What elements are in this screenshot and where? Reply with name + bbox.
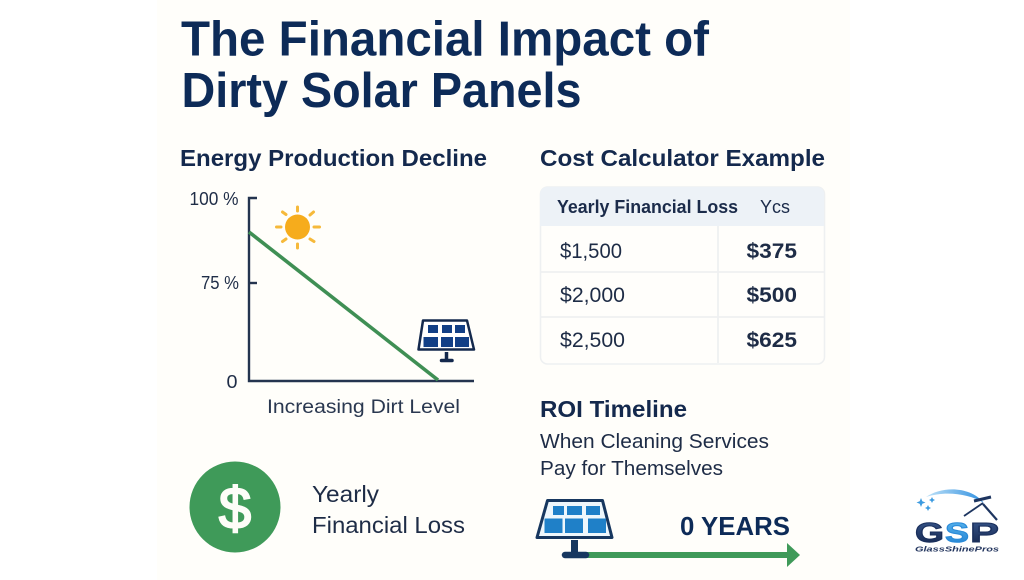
- arrow: [585, 543, 800, 567]
- y axis labels: 75 %: [201, 272, 239, 293]
- table header: [540, 187, 824, 226]
- callout text: [312, 481, 465, 538]
- text: roi subtitle: [540, 431, 769, 480]
- callout: yearly financial loss: [190, 462, 465, 552]
- heading: energy production decline: Energy Production Decline: [180, 145, 487, 171]
- title: [181, 12, 710, 118]
- icon: sun: [276, 207, 320, 248]
- table row: 2500: [560, 329, 797, 352]
- icon: solar panel: [537, 500, 612, 555]
- logo letters: P: [970, 517, 999, 548]
- heading: cost calculator example: Cost Calculator Example: [540, 145, 825, 171]
- y axis labels: 100 %: [190, 188, 238, 209]
- callout text: Yearly: [312, 481, 379, 507]
- x axis label: Increasing Dirt Level: [267, 397, 460, 418]
- icon: solar panel: [418, 320, 474, 360]
- table header: Yearly Financial Loss: [557, 197, 738, 217]
- title: The Financial Impact of: [181, 12, 710, 66]
- text: roi subtitle: Pay for Themselves: [540, 458, 723, 480]
- logo wordmark: GlassShinePros: [915, 546, 999, 554]
- timeline: roi: [537, 500, 800, 567]
- logo letters: G: [915, 517, 944, 548]
- logo sparkles: [916, 497, 935, 511]
- title: Dirty Solar Panels: [182, 64, 582, 118]
- table row: 2500: $625: [746, 329, 797, 352]
- table row: 1500: [560, 240, 797, 263]
- logo swoosh: [926, 489, 984, 503]
- icon: dollar coin: [190, 462, 280, 552]
- table row: 1500: $1,500: [560, 240, 622, 263]
- table header: Ycs: [760, 197, 790, 217]
- decline line: [249, 232, 438, 380]
- logo: GlassShinePros: [915, 489, 999, 554]
- logo squeegee: [964, 497, 997, 520]
- label: 0 years: 0 YEARS: [680, 511, 790, 541]
- logo letters: S: [945, 517, 969, 548]
- heading: roi timeline: ROI Timeline: [540, 396, 687, 422]
- line chart: energy production decline: [190, 188, 474, 418]
- text: roi subtitle: When Cleaning Services: [540, 431, 769, 453]
- table row: 2000: $2,000: [560, 284, 625, 307]
- callout text: Financial Loss: [312, 512, 465, 538]
- table row: 2000: [560, 284, 797, 307]
- y axis labels: 0: [226, 371, 238, 392]
- y axis labels: [190, 188, 239, 392]
- table row: 2000: $500: [746, 284, 797, 307]
- icon: dollar coin: $: [219, 476, 251, 541]
- table: cost calculator: [540, 187, 824, 364]
- table row: 2500: $2,500: [560, 329, 625, 352]
- axes: [249, 198, 474, 381]
- logo letters: [915, 517, 999, 548]
- table row: 1500: $375: [746, 240, 797, 263]
